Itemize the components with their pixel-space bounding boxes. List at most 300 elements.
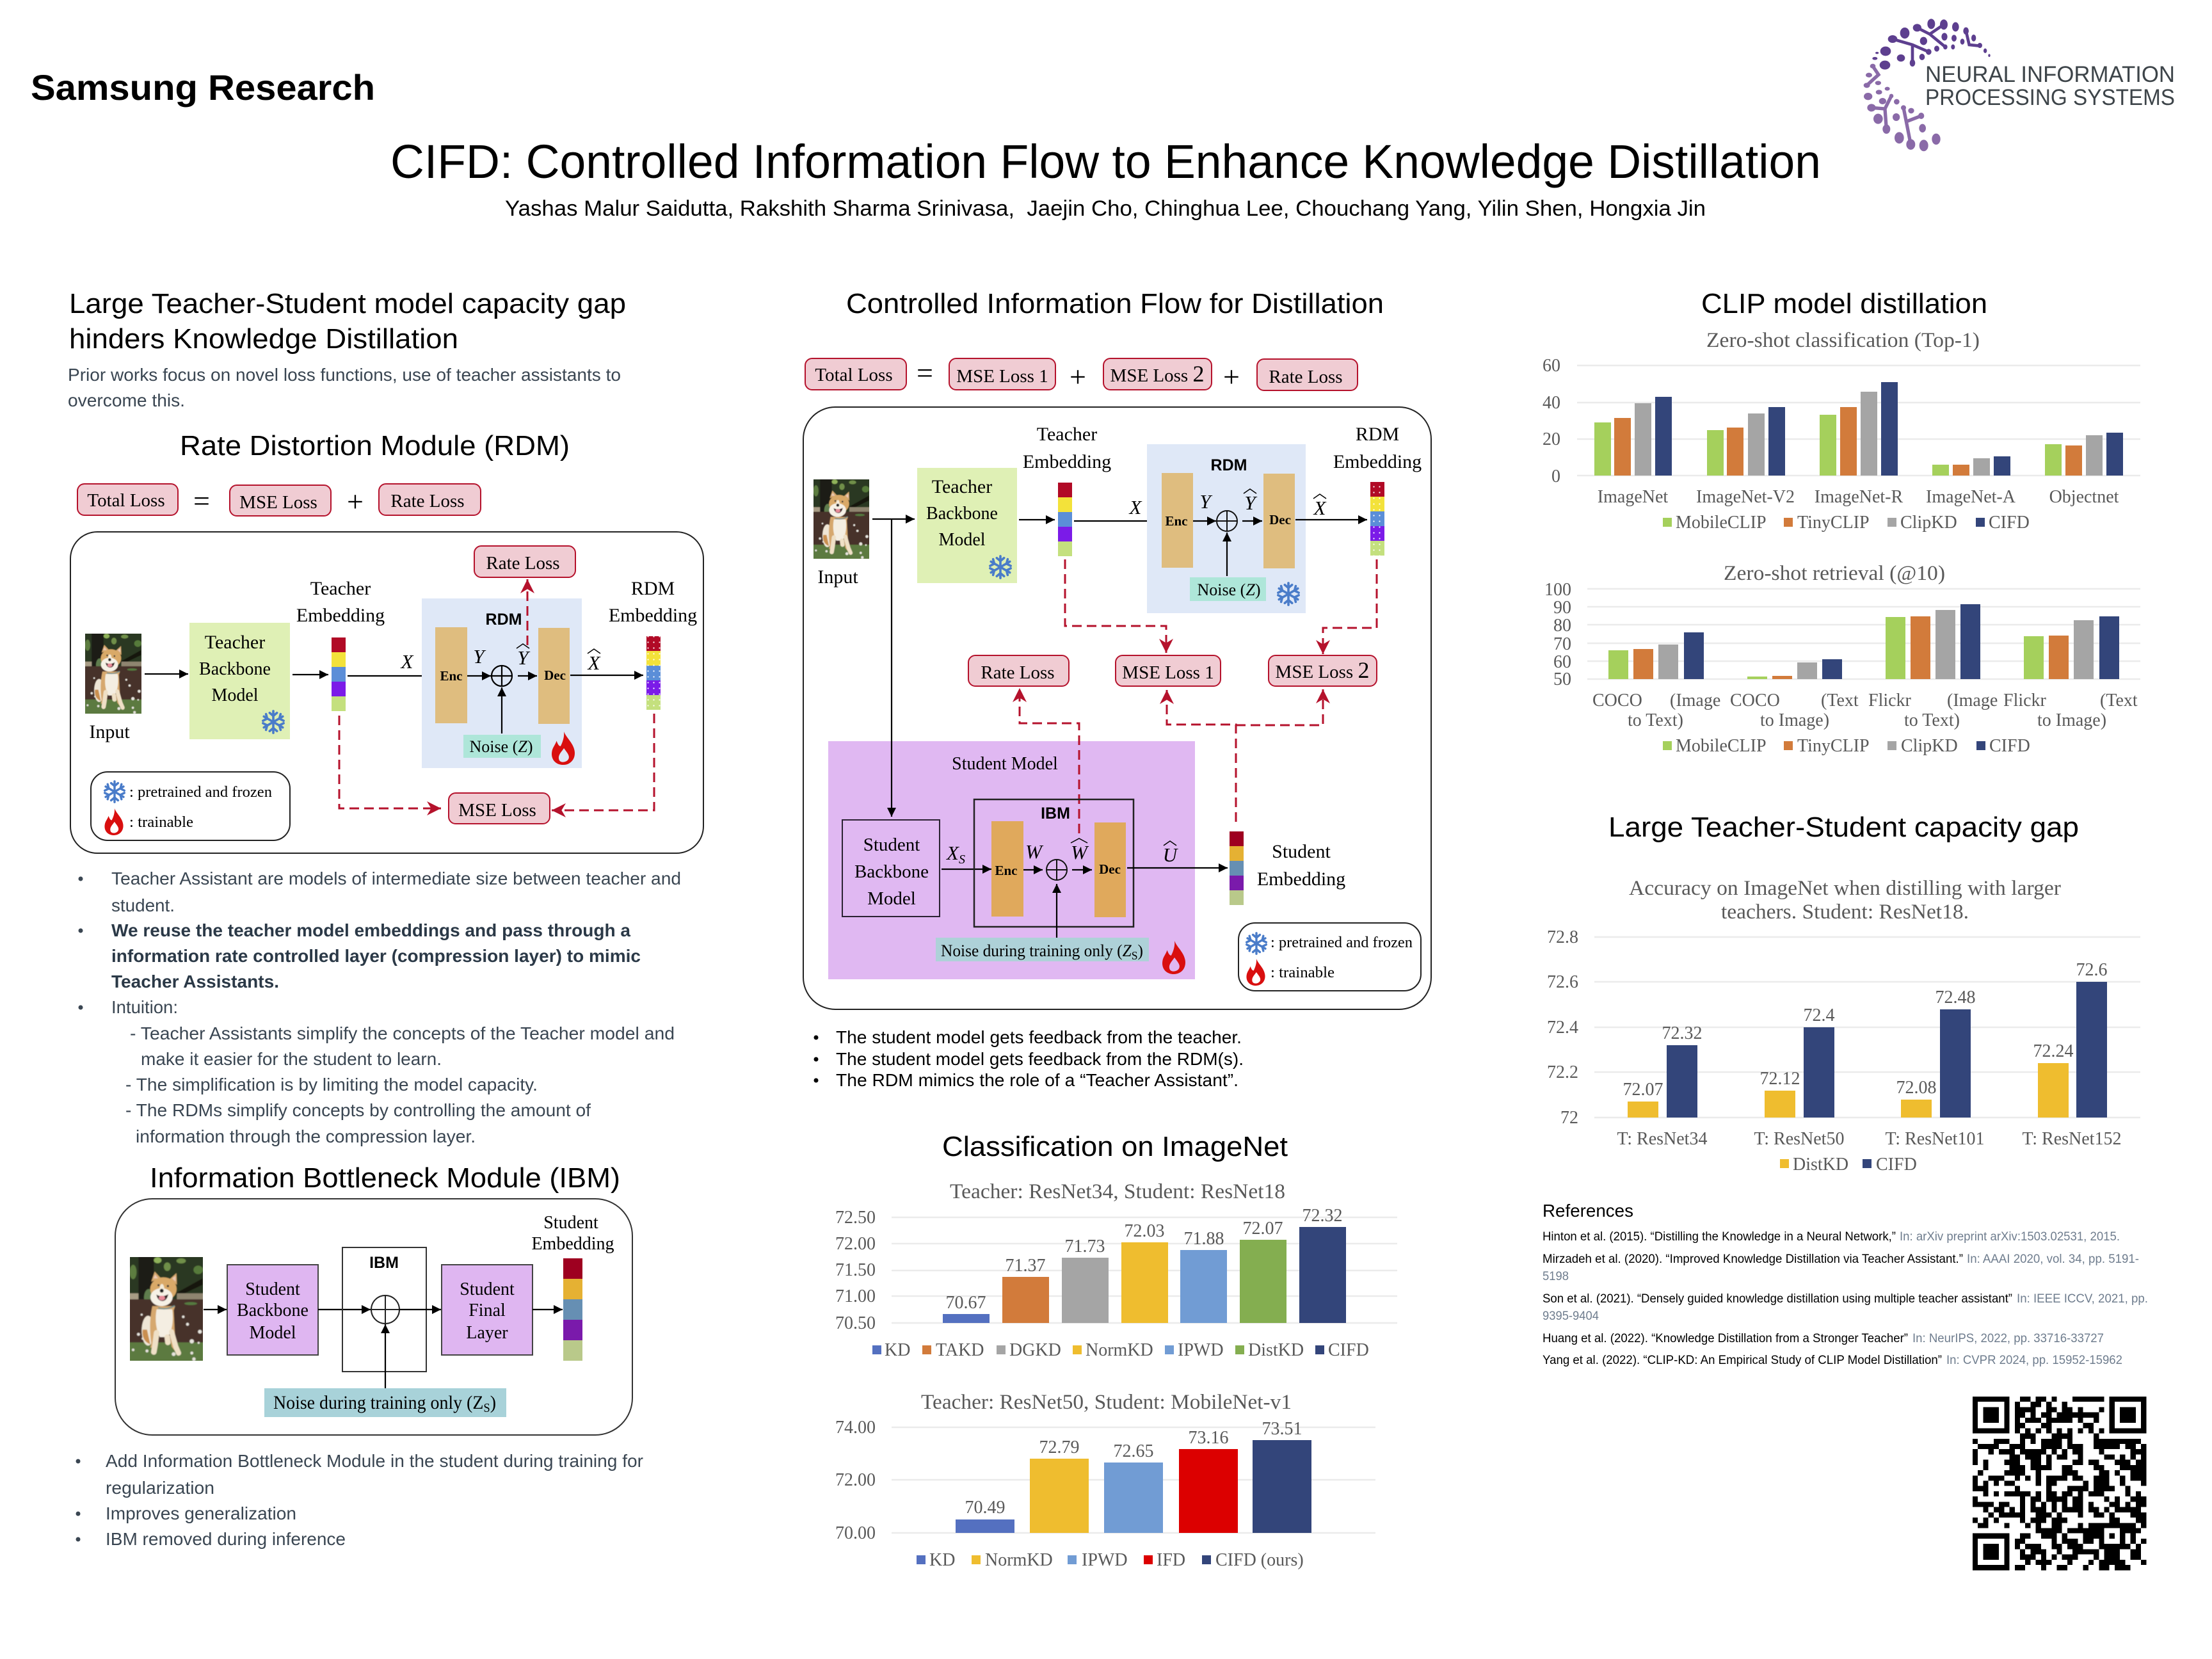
legend text: : pretrained and frozen xyxy=(1270,934,1413,951)
pill: MSE Loss 1: MSE Loss 1 xyxy=(956,366,1048,387)
legend text xyxy=(129,784,272,831)
legend: IPWD xyxy=(1082,1550,1128,1570)
legend: IFD xyxy=(1157,1550,1185,1570)
value labels: 73.51 xyxy=(1262,1419,1302,1439)
legend: MobileCLIP xyxy=(1676,513,1767,533)
value labels xyxy=(1623,960,2107,1100)
value labels: 72.48 xyxy=(1936,988,1975,1007)
student embedding bar xyxy=(563,1258,582,1361)
y axis labels xyxy=(835,1208,876,1333)
legend: DistKD xyxy=(1248,1340,1304,1360)
value labels: 72.07 xyxy=(1243,1219,1283,1238)
arrow: noise to sum xyxy=(1226,533,1228,576)
box: Teacher Backbone Model xyxy=(917,468,1017,583)
icon: flame xyxy=(1246,959,1265,986)
box: Noise Z xyxy=(463,735,541,758)
RDM embedding bar xyxy=(646,636,661,710)
legend: NormKD xyxy=(1086,1340,1153,1360)
label: X hat: X xyxy=(587,652,601,674)
box: Teacher Backbone Model: Backbone xyxy=(199,659,271,679)
chart: ResNet34 to ResNet18 xyxy=(835,1180,1397,1360)
x axis labels: ImageNet-R xyxy=(1815,487,1903,507)
x axis labels: (Image xyxy=(1670,691,1720,710)
legend xyxy=(1780,1155,1917,1174)
label: X: X xyxy=(400,650,414,673)
y axis labels: 100 xyxy=(1544,580,1571,600)
legend: KD xyxy=(885,1340,910,1360)
box: IBM xyxy=(974,799,1134,927)
legend xyxy=(917,1550,1304,1570)
pill: Rate Loss xyxy=(968,655,1069,686)
box: Student Final Layer xyxy=(442,1265,533,1355)
reference list: Son et al. (2021). “Densely guided knowledge distillation using multiple teacher assistant” xyxy=(1543,1292,2012,1306)
legend: CIFD (ours) xyxy=(1215,1550,1304,1570)
image: input dog xyxy=(83,632,143,716)
heading: Controlled Information Flow: Controlled Information Flow for Distillation xyxy=(846,288,1384,319)
icon: flame xyxy=(104,808,124,835)
legend: CIFD xyxy=(1876,1155,1917,1174)
x axis labels: Flickr xyxy=(1868,691,1912,710)
label: Teacher Embedding: Embedding xyxy=(1023,451,1111,472)
bars xyxy=(1608,604,2119,679)
label: Input: Input xyxy=(89,721,130,742)
label: W: W xyxy=(1025,840,1044,863)
arrow: sum to decoder xyxy=(1242,520,1262,522)
y axis labels xyxy=(835,1418,876,1543)
text block: teacher assistant bullets: Intuition: xyxy=(111,997,178,1017)
text block: IBM bullets: regularization xyxy=(106,1478,214,1498)
y axis labels: 72.50 xyxy=(835,1208,876,1228)
block: encoder xyxy=(1162,473,1193,568)
chart title: Zero-shot retrieval (@10) xyxy=(1724,562,1945,585)
text block: teacher assistant bullets: make it easier for the student to learn. xyxy=(141,1049,442,1069)
box: Student Backbone Model: Backbone xyxy=(854,862,929,882)
dashed arrow: teacher embedding to MSE Loss 1 xyxy=(1065,559,1166,653)
dashed arrow: teacher embedding to MSE Loss xyxy=(339,716,441,808)
x axis labels: Flickr xyxy=(2003,691,2047,710)
text block: CIFD bullets: The student model gets feedback from the teacher. xyxy=(836,1027,1242,1047)
pill: MSE Loss 1 xyxy=(949,358,1055,390)
x axis labels: to Text) xyxy=(1628,710,1683,730)
logo wordmark: NEURAL INFORMATION xyxy=(1925,62,2175,87)
dashed arrow: RDM embedding to MSE Loss 2 xyxy=(1323,559,1377,654)
equals sign: = xyxy=(917,357,933,389)
heading: Classification on ImageNet: Classification on ImageNet xyxy=(942,1131,1288,1162)
arrow: encoder to sum xyxy=(467,675,491,677)
bars xyxy=(1628,982,2107,1118)
arrow: decoder to RDM embedding xyxy=(1295,519,1367,520)
chart title: Zero-shot classification (Top-1) xyxy=(1706,329,1980,352)
image: input dog xyxy=(812,477,871,561)
legend: IPWD xyxy=(1178,1340,1224,1360)
label: Student Embedding: Embedding xyxy=(1257,869,1345,890)
box: Teacher Backbone Model: Model xyxy=(938,530,986,550)
value labels: 72.65 xyxy=(1114,1441,1153,1461)
box: RDM: RDM xyxy=(1211,456,1247,474)
icon: snowflake xyxy=(990,556,1011,578)
arrow: embedding to encoder xyxy=(1074,520,1162,522)
arrow: embedding to encoder xyxy=(348,675,435,677)
x axis labels: T: ResNet34 xyxy=(1617,1129,1707,1149)
y axis labels: 70 xyxy=(1553,634,1571,654)
arrow: student to sum xyxy=(318,1309,371,1310)
reference list: Huang et al. (2022). “Knowledge Distillation from a Stronger Teacher” xyxy=(1543,1331,1908,1345)
arrow: backbone to encoder xyxy=(942,869,991,870)
heading: capacity gap hinders distillation: Large Teacher-Student model capacity gap xyxy=(69,288,626,319)
text block: prior works xyxy=(68,365,621,410)
arrow: noise to sum xyxy=(385,1324,386,1388)
image: input dog xyxy=(128,1255,205,1364)
value labels: 72.32 xyxy=(1662,1023,1703,1043)
reference list: In: AAAI 2020, vol. 34, pp. 5191- xyxy=(1967,1252,2139,1266)
y axis labels: 72.6 xyxy=(1547,972,1578,992)
x axis labels xyxy=(1598,487,2119,507)
plus sign: + xyxy=(1223,360,1240,393)
y axis labels: 72 xyxy=(1560,1108,1578,1128)
block: decoder xyxy=(1094,822,1126,917)
text block: IBM bullets: Add Information Bottleneck Module in the student during training for xyxy=(106,1451,643,1471)
heading: CLIP model distillation: CLIP model distillation xyxy=(1701,288,1987,319)
text block: teacher assistant bullets: We reuse the teacher model embeddings and pass through a xyxy=(111,920,630,940)
x axis labels: T: ResNet101 xyxy=(1886,1129,1984,1149)
box: Teacher Backbone Model xyxy=(189,623,290,739)
arrow: encoder to sum xyxy=(1193,520,1216,522)
plus sign: + xyxy=(347,485,364,518)
reference list xyxy=(1543,1230,2148,1367)
dashed arrow: RDM embedding to MSE Loss xyxy=(552,714,654,810)
y axis labels: 74.00 xyxy=(835,1418,876,1438)
label: Student Embedding xyxy=(531,1213,614,1254)
value labels: 70.49 xyxy=(965,1498,1005,1518)
arrow: noise to sum xyxy=(1056,884,1057,938)
text block: teacher assistant bullets: - Teacher Assistants simplify the concepts of the Teacher model and xyxy=(130,1023,675,1043)
value labels: 72.24 xyxy=(2033,1041,2074,1061)
pill: Total Loss: Total Loss xyxy=(87,490,165,511)
value labels: 72.03 xyxy=(1124,1221,1165,1241)
pill: Total Loss xyxy=(77,484,178,515)
legend: DGKD xyxy=(1009,1340,1061,1360)
label: Y: Y xyxy=(473,645,486,668)
arrow: decoder to RDM embedding xyxy=(570,675,643,676)
icon: snowflake xyxy=(1247,933,1266,954)
arrow: sum to final layer xyxy=(399,1309,441,1310)
block: decoder: Dec xyxy=(1099,862,1121,877)
equation: RDM total loss xyxy=(77,484,481,518)
teacher embedding bar xyxy=(1058,483,1072,556)
y axis labels: 40 xyxy=(1543,393,1560,413)
pill: Rate Loss: Rate Loss xyxy=(981,662,1055,683)
x axis labels: ImageNet-A xyxy=(1926,487,2016,507)
equation: CIFD total loss xyxy=(805,357,1358,393)
y axis labels: 70.50 xyxy=(835,1313,876,1333)
arrow: decoder to student embedding xyxy=(1127,867,1228,869)
x axis labels: Objectnet xyxy=(2049,487,2119,507)
label: Input: Input xyxy=(817,566,858,588)
label: RDM Embedding: RDM xyxy=(1356,424,1399,445)
y axis labels xyxy=(1544,580,1571,689)
legend: KD xyxy=(929,1550,955,1570)
pill: Total Loss: Total Loss xyxy=(815,365,893,385)
value labels: 72.32 xyxy=(1302,1206,1343,1226)
box: IBM: IBM xyxy=(1041,805,1070,822)
box: Noise Z: Noise (Z) xyxy=(1198,581,1260,599)
arrow: input to teacher xyxy=(872,518,915,520)
value labels: 71.73 xyxy=(1065,1237,1105,1256)
box: Noise Zs: Noise during training only (Z xyxy=(941,942,1132,960)
block: decoder: Dec xyxy=(544,668,566,683)
panel: RDM diagram xyxy=(70,532,703,853)
block: encoder: Enc xyxy=(440,668,463,684)
block: decoder xyxy=(1263,474,1295,568)
box: Student Backbone Model: Student xyxy=(863,835,920,855)
title: CIFD: Controlled Information Flow to Enhance Knowledge Distillation xyxy=(390,135,1821,188)
x axis labels: (Text xyxy=(1821,691,1859,710)
value labels: 72.6 xyxy=(2076,960,2107,980)
panel: Student Model xyxy=(828,741,1195,979)
value labels: 73.16 xyxy=(1188,1428,1229,1448)
box: Student Backbone Model: Backbone xyxy=(237,1301,309,1320)
arrow: input to student xyxy=(891,519,892,817)
box: Teacher Backbone Model: Teacher xyxy=(932,476,992,497)
legend: CIFD xyxy=(1989,513,2030,533)
references heading: References xyxy=(1543,1201,1633,1221)
legend: TinyCLIP xyxy=(1797,736,1870,756)
y axis labels: 72.8 xyxy=(1547,927,1578,947)
y axis labels: 80 xyxy=(1553,616,1571,636)
box: Student Backbone Model xyxy=(227,1265,318,1355)
box: RDM xyxy=(422,598,582,768)
legend: CIFD xyxy=(1328,1340,1369,1360)
legend text: : trainable xyxy=(1270,965,1334,981)
text block: teacher assistant bullets xyxy=(78,869,681,1146)
legend: NormKD xyxy=(985,1550,1053,1570)
arrow: input to teacher xyxy=(145,673,188,675)
box: Teacher Backbone Model: Model xyxy=(211,685,259,705)
y axis labels: 72.00 xyxy=(835,1234,876,1254)
legend text: : pretrained and frozen xyxy=(129,784,272,801)
box: RDM xyxy=(1147,444,1306,613)
heading: capacity gap hinders distillation xyxy=(69,288,626,355)
label: X hat: X xyxy=(1313,497,1327,519)
bars xyxy=(1594,382,2123,476)
label: Y hat: Y xyxy=(517,646,530,669)
value labels: 70.67 xyxy=(946,1293,986,1313)
y axis labels xyxy=(1543,356,1560,486)
label: X s: S xyxy=(959,853,965,867)
equals sign: = xyxy=(193,485,210,517)
chart: zero-shot classification xyxy=(1543,329,2140,533)
heading: Large Teacher-Student capacity gap: Large Teacher-Student capacity gap xyxy=(1608,812,2079,843)
value labels: 72.12 xyxy=(1760,1069,1800,1089)
reference list: Yang et al. (2022). “CLIP-KD: An Empirical Study of CLIP Model Distillation” xyxy=(1543,1353,1942,1367)
reference list: In: CVPR 2024, pp. 15952-15962 xyxy=(1946,1353,2122,1367)
legend xyxy=(872,1340,1369,1360)
pill: MSE Loss output: MSE Loss xyxy=(458,800,536,821)
label: Teacher Embedding xyxy=(296,578,385,626)
panel: CIFD diagram xyxy=(803,407,1431,1009)
arrow: final layer to embedding xyxy=(533,1309,563,1310)
x axis labels: COCO xyxy=(1730,691,1780,710)
box: Student Backbone Model: Model xyxy=(249,1323,296,1343)
arrow: noise to sum xyxy=(501,687,502,733)
text block: IBM bullets: Improves generalization xyxy=(106,1503,296,1523)
box: Student Backbone Model: Student xyxy=(245,1279,300,1299)
box: Student Backbone Model: Model xyxy=(867,888,916,909)
pill: Total Loss xyxy=(805,358,906,390)
value labels: 72.4 xyxy=(1804,1006,1834,1025)
label: RDM Embedding: Embedding xyxy=(1333,451,1422,472)
x axis labels: ImageNet-V2 xyxy=(1696,487,1795,507)
icon: snowflake xyxy=(263,711,284,733)
box: Noise Z xyxy=(1190,577,1266,601)
value labels: 72.08 xyxy=(1896,1078,1937,1098)
label: Teacher Embedding: Teacher xyxy=(1037,424,1097,445)
arrow: sum to decoder xyxy=(1072,869,1092,870)
value labels xyxy=(965,1419,1302,1518)
label: Student Embedding: Student xyxy=(543,1213,598,1233)
dashed arrow: branch to MSE Loss 2 xyxy=(1236,689,1323,725)
chart: ResNet50 to MobileNet xyxy=(835,1391,1375,1570)
chart: zero-shot retrieval xyxy=(1544,562,2140,756)
legend: MobileCLIP xyxy=(1676,736,1767,756)
x axis labels: to Text) xyxy=(1904,710,1960,730)
x axis labels xyxy=(1617,1129,2121,1149)
bars xyxy=(956,1440,1311,1533)
box: Student Final Layer: Final xyxy=(469,1301,506,1320)
pill: Rate Loss xyxy=(379,484,481,515)
logo wordmark: PROCESSING SYSTEMS xyxy=(1925,85,2175,110)
arrow: input to student xyxy=(204,1309,227,1310)
box: IBM xyxy=(342,1247,426,1372)
box: Noise Z: Noise (Z) xyxy=(470,737,533,756)
y axis labels: 72.2 xyxy=(1547,1062,1578,1082)
text block: prior works: Prior works focus on novel loss functions, use of teacher assistants to xyxy=(68,365,621,385)
legend xyxy=(91,772,290,840)
x axis labels: T: ResNet50 xyxy=(1754,1129,1844,1149)
pill: Rate Loss xyxy=(1257,359,1358,390)
x axis labels: to Image) xyxy=(2037,710,2106,730)
text block: IBM bullets: IBM removed during inference xyxy=(106,1529,346,1549)
x axis labels xyxy=(1592,691,2138,730)
label: Student Embedding: Embedding xyxy=(531,1234,614,1254)
arrow: teacher to embedding xyxy=(293,674,328,675)
teacher embedding bar xyxy=(332,637,346,711)
reference list: In: NeurIPS, 2022, pp. 33716-33727 xyxy=(1912,1331,2104,1345)
block: encoder: Enc xyxy=(1165,513,1188,529)
heading: Information Bottleneck Module: Information Bottleneck Module (IBM) xyxy=(150,1162,620,1194)
x axis labels: COCO xyxy=(1592,691,1642,710)
box: Noise Zs xyxy=(264,1388,506,1417)
box: Noise Zs: S xyxy=(483,1401,490,1415)
text block: teacher assistant bullets: - The RDMs simplify concepts by controlling the amount of xyxy=(125,1100,591,1120)
value labels: 72.79 xyxy=(1039,1438,1079,1457)
legend: DistKD xyxy=(1793,1155,1848,1174)
pill: MSE Loss 1: MSE Loss 1 xyxy=(1122,662,1214,683)
pill: Rate Loss: Rate Loss xyxy=(1269,367,1343,387)
y axis labels: 60 xyxy=(1543,356,1560,376)
y axis labels: 90 xyxy=(1553,598,1571,618)
pill: MSE Loss: MSE Loss xyxy=(239,492,317,513)
box: Student Final Layer: Layer xyxy=(466,1323,508,1343)
value labels: 71.37 xyxy=(1005,1256,1046,1276)
label: Y hat: Y xyxy=(1244,492,1257,514)
text block: IBM bullets xyxy=(76,1451,643,1549)
icon: flame xyxy=(1162,941,1185,974)
logo: Samsung Research: Samsung Research xyxy=(31,67,375,108)
reference list: 9395-9404 xyxy=(1543,1309,1599,1323)
value labels: 72.07 xyxy=(1623,1080,1663,1100)
block: decoder xyxy=(538,628,570,724)
pill: MSE Loss 1 xyxy=(1116,655,1221,686)
label: Student Embedding xyxy=(1257,841,1345,890)
pill: Rate Loss output xyxy=(474,546,575,577)
value labels xyxy=(946,1206,1343,1313)
label: Teacher Embedding xyxy=(1023,424,1111,472)
reference list: Hinton et al. (2015). “Distilling the Knowledge in a Neural Network,” xyxy=(1543,1230,1896,1244)
y axis labels: 71.50 xyxy=(835,1260,876,1280)
label: RDM Embedding: Embedding xyxy=(609,605,697,626)
label: Teacher Embedding: Embedding xyxy=(296,605,385,626)
y axis labels: 72.4 xyxy=(1547,1018,1578,1038)
legend: ClipKD xyxy=(1901,736,1958,756)
box: Noise Zs: Noise during training only (Z xyxy=(273,1392,499,1413)
reference list: In: IEEE ICCV, 2021, pp. xyxy=(2017,1292,2148,1306)
box: IBM: IBM xyxy=(369,1254,399,1272)
icon: snowflake xyxy=(1278,583,1299,605)
legend: TAKD xyxy=(936,1340,984,1360)
text block: teacher assistant bullets: Teacher Assistant are models of intermediate size between teacher and xyxy=(111,869,681,888)
arrow: sum to decoder xyxy=(518,675,537,677)
value labels: 71.88 xyxy=(1184,1229,1224,1249)
x axis labels: (Image xyxy=(1947,691,1998,710)
y axis labels: 0 xyxy=(1551,467,1560,486)
legend: ClipKD xyxy=(1900,513,1957,533)
chart title xyxy=(1629,877,2061,924)
pill: MSE Loss output xyxy=(449,793,550,824)
label: RDM Embedding: RDM xyxy=(631,578,675,599)
pill: MSE Loss 2: MSE Loss 2 xyxy=(1110,361,1204,387)
block: encoder xyxy=(435,627,467,723)
text block: CIFD bullets xyxy=(814,1027,1244,1090)
block: encoder: Enc xyxy=(995,863,1018,878)
panel: Student Model: Student Model xyxy=(952,754,1058,774)
pill: Rate Loss: Rate Loss xyxy=(390,491,465,511)
text block: prior works: overcome this. xyxy=(68,390,185,410)
box: Noise Zs: S xyxy=(1132,949,1138,962)
sum node xyxy=(371,1295,399,1324)
heading: capacity gap hinders distillation: hinders Knowledge Distillation xyxy=(69,323,458,355)
box: Student Final Layer: Student xyxy=(460,1279,515,1299)
label: Teacher Embedding: Teacher xyxy=(310,578,371,599)
x axis labels: to Image) xyxy=(1760,710,1829,730)
pill: MSE Loss 2: MSE Loss 2 xyxy=(1276,657,1369,683)
reference list: Mirzadeh et al. (2020). “Improved Knowledge Distillation via Teacher Assistant.” xyxy=(1543,1252,1963,1266)
x axis labels: ImageNet xyxy=(1598,487,1668,507)
arrow: teacher to embedding xyxy=(1019,519,1055,520)
legend xyxy=(1663,513,2030,533)
text block: teacher assistant bullets: information rate controlled layer (compression layer) to mimic xyxy=(111,946,641,966)
text block: teacher assistant bullets: Teacher Assistants. xyxy=(111,972,279,991)
text block: CIFD bullets: The RDM mimics the role of a “Teacher Assistant”. xyxy=(836,1070,1238,1090)
reference list: In: arXiv preprint arXiv:1503.02531, 2015. xyxy=(1900,1230,2120,1244)
y axis labels xyxy=(1547,927,1578,1128)
box: Noise Zs: ) xyxy=(1138,942,1143,960)
box: Noise Zs xyxy=(936,938,1149,962)
chart title: teachers. Student: ResNet18. xyxy=(1721,901,1969,924)
icon: snowflake xyxy=(105,781,124,802)
pill: MSE Loss xyxy=(230,485,331,516)
box: RDM: RDM xyxy=(486,611,522,629)
